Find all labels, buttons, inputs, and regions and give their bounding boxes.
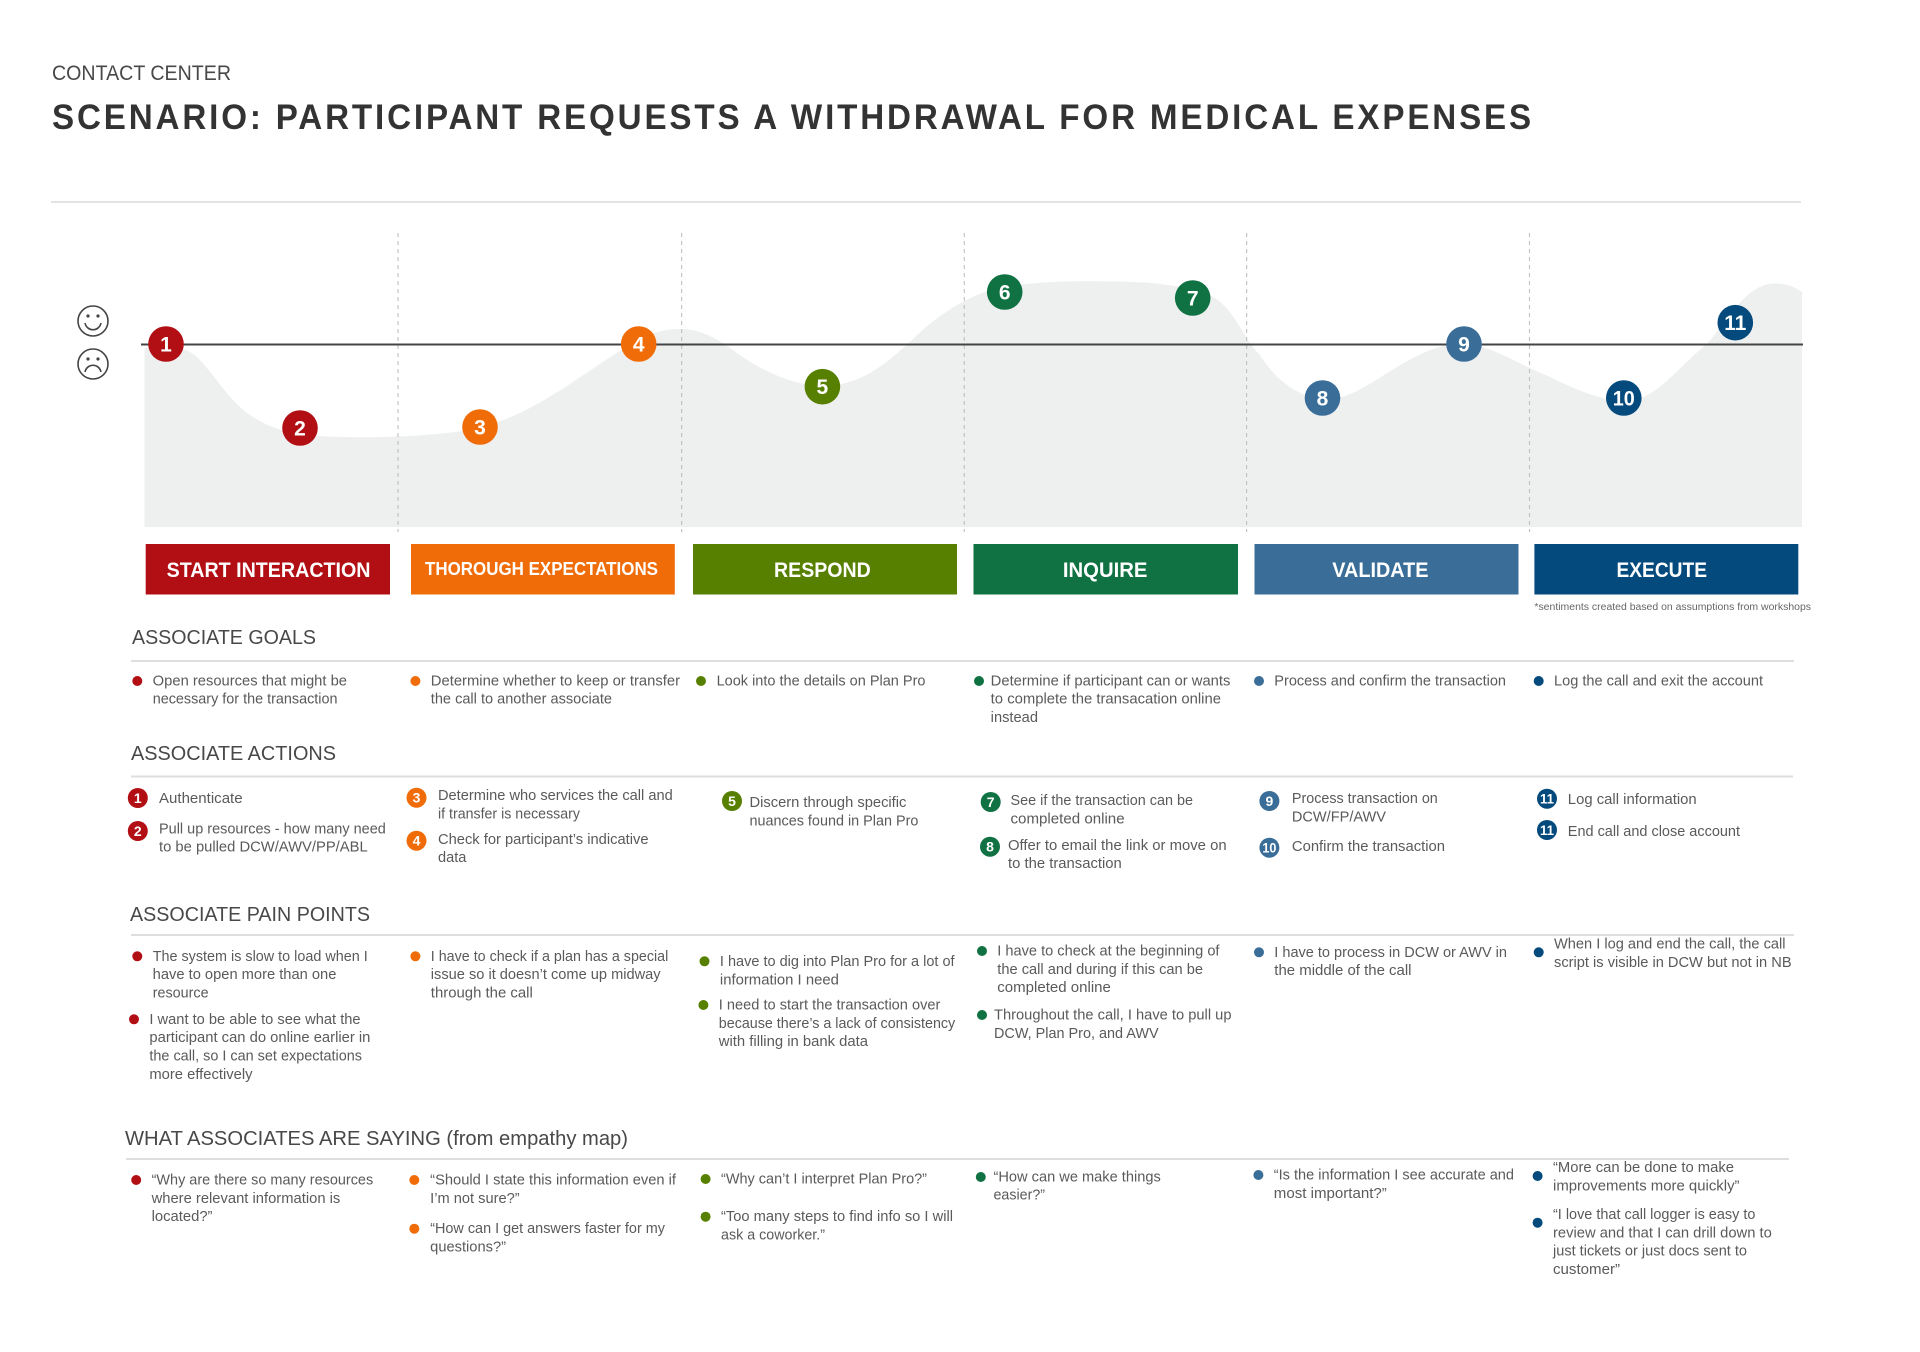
pain point: pull up systems	[977, 1008, 1232, 1042]
action 9: Process transaction on	[1292, 791, 1438, 807]
action 11: end call: End call and close account	[1568, 824, 1740, 840]
action 5: nuances found in Plan Pro	[750, 814, 918, 830]
quote: improvements	[1533, 1160, 1740, 1194]
quote: information accurate: most important?”	[1274, 1186, 1387, 1202]
action 7: 7	[987, 794, 995, 810]
action 9: DCW/FP/AWV	[1292, 810, 1386, 826]
pain point: process mid call: the middle of the call	[1274, 963, 1412, 979]
pain point: start over: I need to start the transaction over	[719, 998, 941, 1014]
pain point: dig into Plan Pro	[700, 954, 956, 988]
action 1: 1	[134, 790, 142, 806]
phase: execute: EXECUTE	[1616, 558, 1707, 582]
quote: so many resources: where relevant information is	[151, 1191, 340, 1207]
step 4 marker	[621, 326, 656, 362]
pain point: see online earlier	[129, 1012, 370, 1083]
quote: so many resources	[131, 1172, 373, 1225]
panel: associate actions	[128, 742, 1793, 872]
action 3	[406, 788, 673, 822]
pain point: start over: with filling in bank data	[718, 1034, 869, 1050]
pain point: slow load: resource	[153, 986, 209, 1002]
phase: validate	[1254, 544, 1518, 594]
pain point: dig into Plan Pro: information I need	[720, 972, 839, 988]
step 6 marker	[987, 274, 1022, 310]
pain point: slow load: have to open more than one	[153, 967, 336, 983]
action 10: Confirm the transaction	[1292, 839, 1445, 855]
step 9 marker	[1446, 326, 1482, 362]
goal: start interaction: Open resources that might be	[153, 674, 347, 690]
quote: call logger: review and that I can drill down to	[1553, 1226, 1772, 1242]
step 3 marker	[462, 409, 498, 445]
action 7: completed online	[1010, 812, 1125, 828]
sentiment chart	[78, 233, 1803, 532]
step 10 marker	[1606, 380, 1642, 416]
phase bars	[146, 544, 1798, 594]
quote: make things easier	[976, 1170, 1161, 1204]
action 4: data	[438, 850, 467, 866]
action 1	[128, 788, 243, 808]
phase: execute	[1534, 544, 1798, 594]
pain point: slow load	[132, 949, 368, 1002]
action 9: 9	[1266, 793, 1274, 809]
action 5: Discern through specific	[750, 795, 906, 811]
pain point: check at beginning: the call and during if this can be	[997, 962, 1203, 978]
quote: improvements: “More can be done to make	[1553, 1160, 1734, 1176]
quote: so many resources: “Why are there so many resources	[152, 1172, 373, 1188]
action 8: to the transaction	[1008, 856, 1122, 872]
phase: validate: VALIDATE	[1332, 558, 1428, 582]
quote: so many resources: located?”	[152, 1209, 213, 1225]
step 8 marker: 8	[1317, 388, 1329, 410]
action 2: 2	[134, 823, 142, 839]
action 10	[1259, 838, 1445, 858]
phase: inquire: INQUIRE	[1063, 558, 1147, 582]
heading: what associates are saying: WHAT ASSOCIATES ARE SAYING (from empathy map)	[125, 1127, 628, 1150]
quote: improvements: improvements more quickly”	[1553, 1178, 1740, 1194]
action 9	[1259, 791, 1438, 826]
goal: start interaction	[132, 674, 347, 708]
step 4 marker: 4	[633, 334, 645, 356]
action 11: log call: 11	[1540, 791, 1554, 807]
goal: inquire: to complete the transacation online	[991, 692, 1221, 708]
step 9 marker: 9	[1458, 334, 1470, 356]
step 11 marker: 11	[1724, 312, 1747, 335]
goal: inquire: instead	[991, 710, 1038, 726]
quote: answers faster: “How can I get answers faster for my	[430, 1221, 666, 1237]
phase: inquire	[974, 544, 1238, 594]
step 5 marker: 5	[817, 376, 829, 399]
pain point: see online earlier: more effectively	[149, 1067, 253, 1083]
pain point: special issue: I have to check if a plan has a special	[431, 949, 668, 965]
quote: information accurate	[1253, 1168, 1514, 1202]
title: SCENARIO: PARTICIPANT REQUESTS A WITHDRAWAL FOR MEDICAL EXPENSES	[52, 98, 1534, 137]
pain point: call script: script is visible in DCW but not in NB	[1554, 955, 1792, 971]
quote: call logger	[1533, 1207, 1772, 1278]
panel: what associates are saying	[125, 1127, 1789, 1278]
goal: inquire	[974, 674, 1230, 726]
quote: should I state: “Should I state this information even if	[430, 1172, 677, 1188]
pain point: process mid call: I have to process in DCW or AWV in	[1274, 945, 1507, 961]
quote: information accurate: “Is the information I see accurate and	[1274, 1168, 1514, 1184]
action 3: Determine who services the call and	[438, 788, 673, 804]
quote: interpret Plan Pro: “Why can’t I interpret Plan Pro?”	[721, 1172, 927, 1188]
eyebrow label: CONTACT CENTER	[52, 62, 231, 85]
pain point: special issue: through the call	[431, 986, 533, 1002]
action 4: Check for participant’s indicative	[438, 832, 648, 848]
goal: thorough expectations: the call to another associate	[431, 692, 612, 708]
quote: call logger: customer”	[1553, 1262, 1620, 1278]
panel: associate pain points	[129, 903, 1794, 1083]
pain point: call script	[1534, 936, 1792, 971]
action 10: 10	[1262, 840, 1277, 856]
pain point: pull up systems: Throughout the call, I have to pull up	[994, 1008, 1232, 1024]
phase: respond: RESPOND	[774, 558, 871, 582]
step 10 marker: 10	[1613, 388, 1635, 410]
icon: happy face	[78, 306, 108, 336]
pain point: check at beginning	[977, 944, 1220, 996]
action 1: Authenticate	[159, 791, 243, 807]
pain point: check at beginning: I have to check at the beginning of	[997, 944, 1220, 960]
action 2: to be pulled DCW/AWV/PP/ABL	[159, 840, 368, 856]
step 1 marker	[148, 326, 184, 362]
step 11 marker	[1718, 305, 1753, 341]
sentiment area	[144, 281, 1802, 527]
quote: call logger: just tickets or just docs sent to	[1552, 1244, 1747, 1260]
step 6 marker: 6	[999, 282, 1011, 304]
footnote: *sentiments created based on assumptions from workshops	[1534, 602, 1811, 613]
phase: thorough expectations: THOROUGH EXPECTATIONS	[425, 558, 658, 579]
pain point: special issue: issue so it doesn’t come up midway	[431, 967, 661, 983]
step 7 marker	[1175, 280, 1210, 316]
action 7: See if the transaction can be	[1010, 793, 1193, 809]
phase: start interaction	[146, 544, 390, 594]
pain point: start over	[698, 998, 956, 1050]
pain point: see online earlier: participant can do online earlier in	[149, 1030, 370, 1046]
pain point: pull up systems: DCW, Plan Pro, and AWV	[994, 1026, 1159, 1042]
action 3: 3	[413, 790, 421, 806]
pain point: dig into Plan Pro: I have to dig into Plan Pro for a lot of	[720, 954, 956, 970]
action 3: if transfer is necessary	[438, 806, 581, 822]
goal: thorough expectations	[410, 674, 680, 708]
quote: should I state: I’m not sure?”	[430, 1191, 520, 1207]
quote: too many steps	[701, 1209, 953, 1244]
heading: associate pain points: ASSOCIATE PAIN POINTS	[130, 903, 370, 926]
quote: too many steps: ask a coworker.”	[721, 1228, 825, 1244]
pain point: call script: When I log and end the call, the call	[1554, 936, 1786, 952]
pain point: start over: because there’s a lack of consistency	[719, 1016, 956, 1032]
phase: thorough expectations	[411, 544, 675, 594]
quote: answers faster	[409, 1221, 666, 1256]
phase: start interaction: START INTERACTION	[167, 558, 370, 582]
pain point: see online earlier: I want to be able to see what the	[149, 1012, 361, 1028]
icon: sad face	[78, 349, 108, 379]
action 4: 4	[413, 833, 421, 849]
action 11: end call: 11	[1540, 822, 1554, 838]
step 3 marker: 3	[474, 416, 486, 440]
step 8 marker	[1305, 380, 1340, 416]
header	[52, 62, 1534, 137]
goal: execute: Log the call and exit the account	[1554, 674, 1763, 690]
goal: respond: Look into the details on Plan Pro	[717, 674, 926, 690]
quote: make things easier: “How can we make things	[994, 1170, 1161, 1186]
action 7	[981, 792, 1193, 828]
quote: call logger: “I love that call logger is easy to	[1553, 1207, 1755, 1223]
step 2 marker	[282, 410, 318, 446]
action 11: log call: Log call information	[1568, 792, 1697, 808]
pain point: check at beginning: completed online	[997, 980, 1111, 996]
step 1 marker: 1	[160, 334, 172, 356]
quote: answers faster: questions?”	[430, 1240, 506, 1256]
action 11: end call	[1537, 820, 1740, 840]
action 2	[128, 821, 386, 856]
quote: make things easier: easier?”	[994, 1188, 1045, 1204]
action 2: Pull up resources - how many need	[159, 822, 386, 838]
neutral baseline	[141, 344, 1803, 346]
step 2 marker: 2	[294, 418, 306, 440]
panel: associate goals	[131, 626, 1794, 726]
action 5	[722, 791, 918, 830]
goal: inquire: Determine if participant can or wants	[991, 674, 1230, 690]
action 4	[406, 831, 648, 866]
action 8: 8	[986, 839, 994, 855]
pain point: see online earlier: the call, so I can set expectations	[149, 1048, 362, 1064]
action 5: 5	[728, 793, 736, 809]
quote: too many steps: “Too many steps to find info so I will	[721, 1209, 953, 1225]
step 7 marker: 7	[1187, 288, 1199, 310]
pain point: process mid call	[1254, 945, 1507, 979]
step 5 marker	[805, 369, 840, 405]
pain point: slow load: The system is slow to load when I	[153, 949, 368, 965]
pain point: special issue	[410, 949, 668, 1002]
heading: associate goals: ASSOCIATE GOALS	[132, 626, 316, 649]
heading: associate actions: ASSOCIATE ACTIONS	[131, 742, 336, 765]
action 8: Offer to email the link or move on	[1008, 838, 1227, 854]
action 11: log call	[1537, 789, 1697, 809]
phase: respond	[693, 544, 957, 594]
goal: thorough expectations: Determine whether to keep or transfer	[431, 674, 680, 690]
quote: should I state	[409, 1172, 677, 1207]
goal: start interaction: necessary for the transaction	[153, 692, 338, 708]
goal: validate: Process and confirm the transaction	[1274, 674, 1506, 690]
action 8	[980, 837, 1227, 872]
